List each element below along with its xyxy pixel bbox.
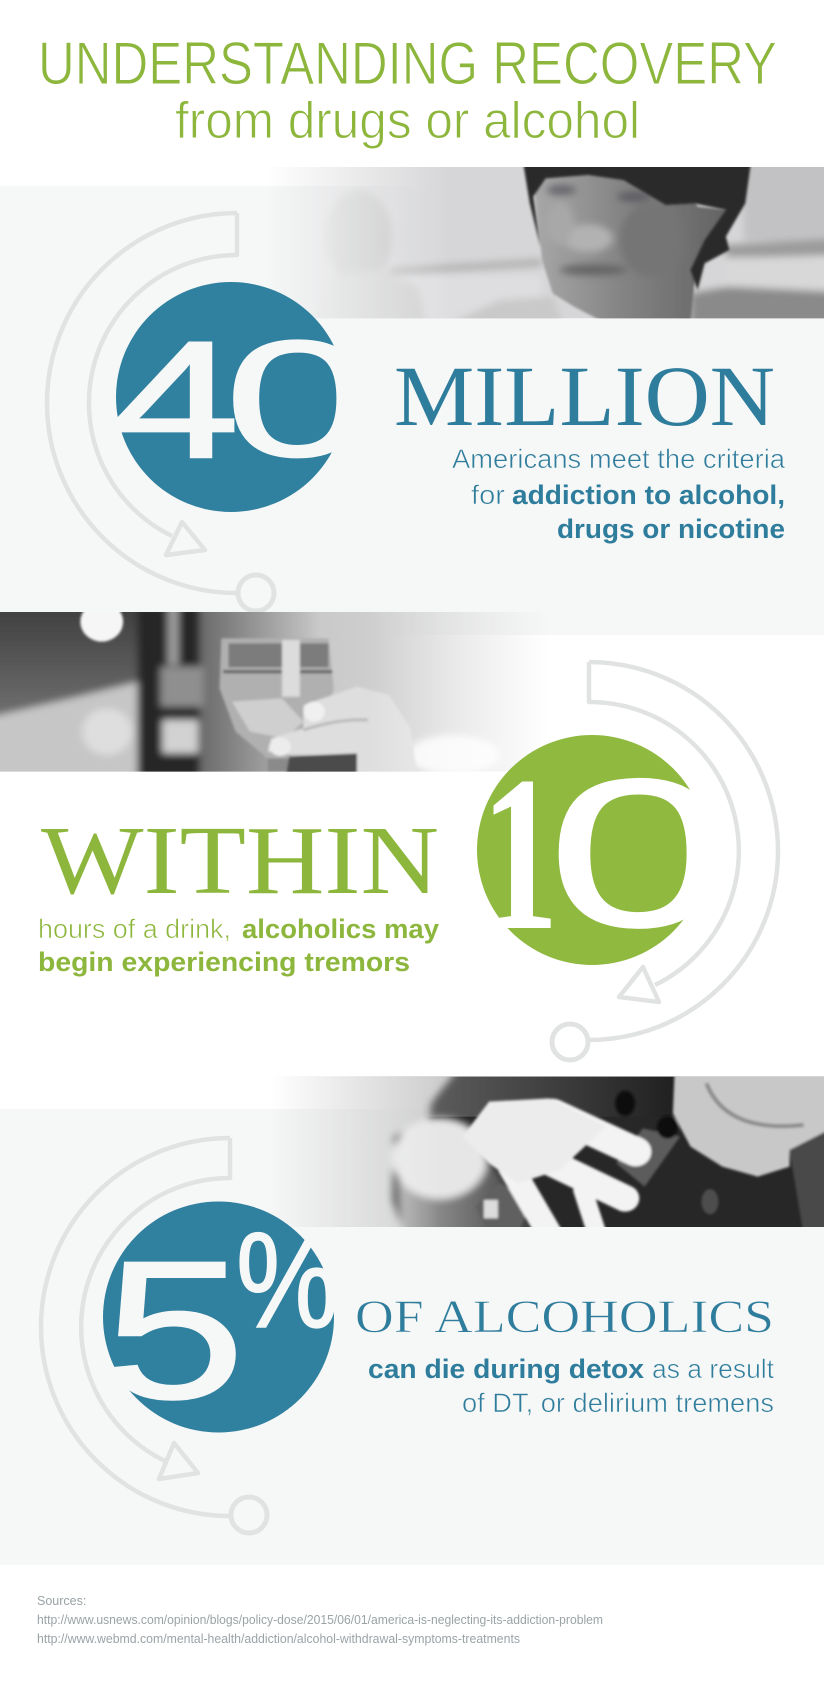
- circle: 5%: [103, 1202, 339, 1440]
- description 2: alcoholics may: [242, 914, 439, 944]
- ring node 3: [231, 1497, 267, 1533]
- title: [38, 30, 777, 150]
- circle: 40: 0: [224, 306, 372, 491]
- description 2: begin experiencing tremors: [38, 947, 410, 977]
- circle: 10: 1: [481, 731, 559, 977]
- photo: young man: [303, 167, 824, 318]
- panel: within 10: [0, 602, 778, 1060]
- circle: 40: [112, 282, 372, 512]
- description 1: drugs or nicotine: [557, 514, 785, 544]
- panel: 5 percent: [0, 1070, 824, 1565]
- circle: 5%: 5: [104, 1220, 245, 1440]
- heading: within: WITHIN: [41, 807, 439, 915]
- photo: hand holding bottles: [288, 1076, 824, 1227]
- circle: 40: 4: [112, 308, 239, 493]
- circle: 10: 0: [547, 735, 730, 971]
- heading: of alcoholics: OF ALCOHOLICS: [355, 1291, 774, 1343]
- inner arc 2: [589, 662, 739, 985]
- description 3: as a result: [652, 1354, 774, 1384]
- description 1: for: [471, 480, 505, 510]
- panel: 40 million: [0, 160, 824, 635]
- inner arc 1: [89, 213, 237, 536]
- sources: http://www.usnews.com/opinion/blogs/policy-dose/2015/06/01/america-is-neglecting-its-addiction-problem: [37, 1613, 603, 1627]
- sources: http://www.webmd.com/mental-health/addiction/alcohol-withdrawal-symptoms-treatments: [37, 1632, 520, 1646]
- arrowhead 3: [159, 1443, 198, 1479]
- circle: 10: [477, 731, 730, 977]
- circle: 5%: %: [236, 1204, 339, 1356]
- title line 2: from drugs or alcohol: [175, 92, 640, 150]
- description 3: [368, 1354, 774, 1418]
- description 2: [38, 914, 439, 977]
- arrowhead 1: [166, 522, 205, 555]
- arrowhead 2: [619, 967, 659, 1002]
- description 1: addiction to alcohol,: [512, 480, 785, 510]
- ring node 1: [238, 575, 274, 611]
- inner arc 3: [81, 1138, 230, 1461]
- sources: [37, 1594, 603, 1646]
- description 1: Americans meet the criteria: [452, 444, 786, 474]
- ring node 2: [552, 1024, 588, 1060]
- outer arc 2: [589, 662, 778, 1040]
- photo: wine glass: [0, 612, 509, 772]
- description 3: of DT, or delirium tremens: [462, 1388, 774, 1418]
- heading: million: MILLION: [394, 348, 775, 444]
- description 2: hours of a drink,: [38, 914, 231, 944]
- description 3: can die during detox: [368, 1354, 644, 1384]
- outer arc 1: [47, 213, 237, 593]
- description 1: [452, 444, 786, 544]
- outer arc 3: [41, 1138, 230, 1516]
- sources: Sources:: [37, 1594, 86, 1608]
